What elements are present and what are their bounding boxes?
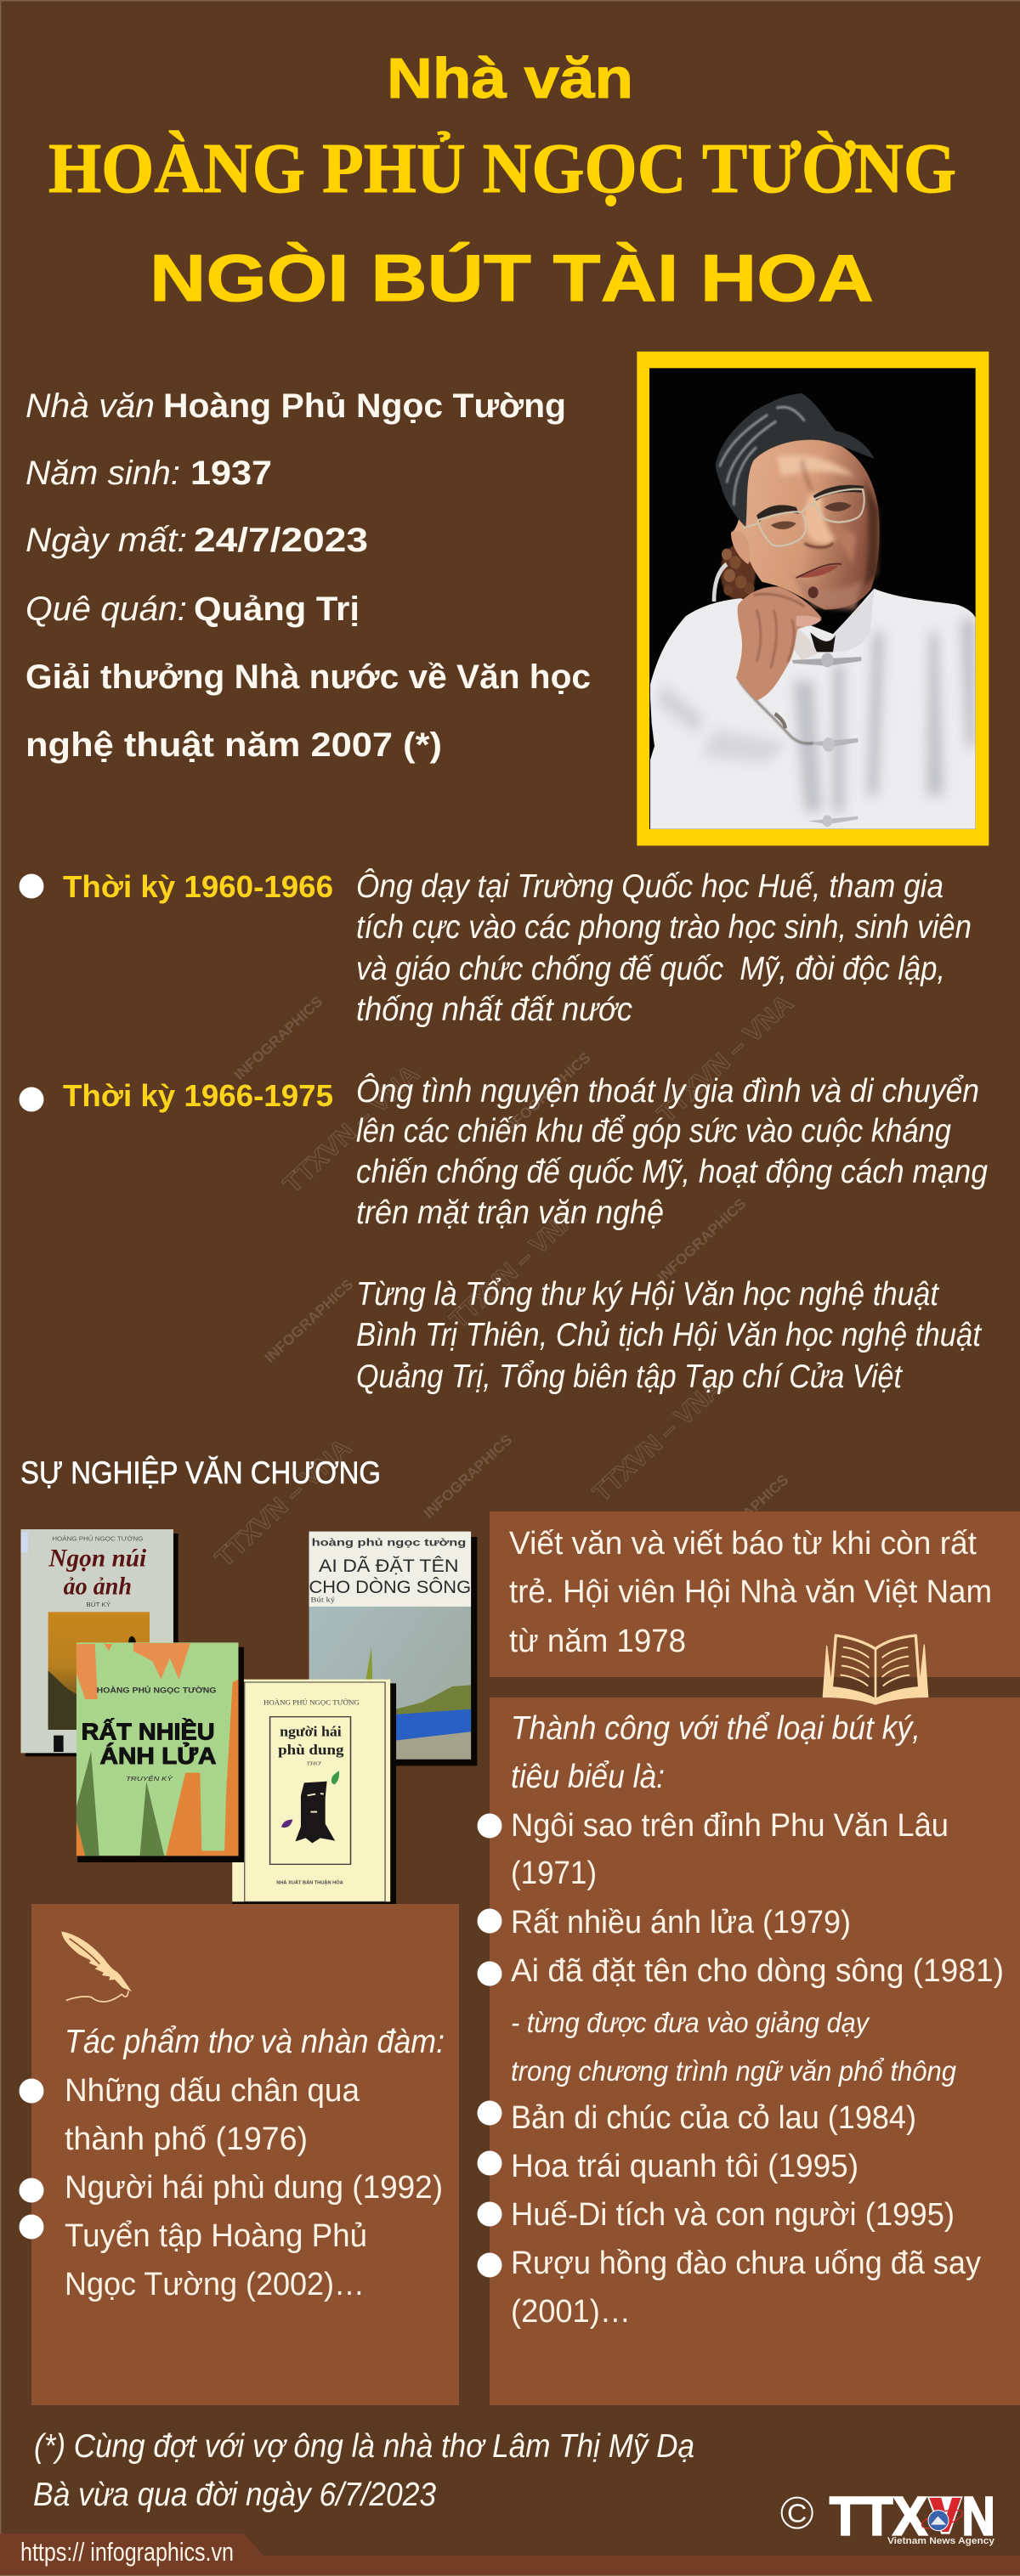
panel: essays: (1971) bbox=[511, 1856, 597, 1891]
title bbox=[48, 47, 956, 315]
watermarks: INFOGRAPHICS bbox=[421, 1432, 515, 1522]
book cover: Người hái phù dung: HOÀNG PHỦ NGỌC TƯỜNG bbox=[264, 1698, 360, 1707]
book cover: Rất nhiều ánh lửa: TRUYỆN KÝ bbox=[126, 1775, 173, 1782]
book covers bbox=[20, 1529, 477, 1906]
book cover: Ngọn núi ảo ảnh: Ngọn núi bbox=[48, 1544, 146, 1572]
profile text: Hoàng Phủ Ngọc Tường bbox=[163, 387, 566, 425]
book cover: Rất nhiều ánh lửa: RẤT NHIỀU bbox=[82, 1719, 215, 1745]
panel: poetry: Tuyển tập Hoàng Phủ bbox=[65, 2218, 367, 2254]
book cover: Ngọn núi ảo ảnh: BÚT KÝ bbox=[86, 1601, 110, 1608]
timeline: 1960-1966: và giáo chức chống đế quốc Mỹ, đòi độc lập, bbox=[356, 951, 945, 987]
book cover: Người hái phù dung: người hái bbox=[280, 1723, 342, 1740]
profile text: 24/7/2023 bbox=[194, 522, 368, 559]
panel: membership: Viết văn và viết báo từ khi còn rất bbox=[509, 1526, 977, 1562]
panel: essays: Huế-Di tích và con người (1995) bbox=[511, 2197, 955, 2233]
footnote bbox=[33, 2428, 694, 2513]
panel: poetry: Những dấu chân qua bbox=[65, 2073, 360, 2109]
profile text: Quê quán: bbox=[26, 590, 187, 628]
book cover: Ai đã đặt tên cho dòng sông: AI DÃ ĐẶT TÊN bbox=[319, 1555, 459, 1576]
book cover: Ai đã đặt tên cho dòng sông: Bút ký bbox=[310, 1596, 336, 1603]
watermarks: INFOGRAPHICS bbox=[262, 1276, 356, 1366]
title: Nhà văn bbox=[387, 47, 633, 110]
watermarks: TTXVN – VNA bbox=[210, 1433, 357, 1573]
profile text: Giải thưởng Nhà nước về Văn học bbox=[26, 658, 591, 696]
book cover: Ai đã đặt tên cho dòng sông bbox=[309, 1532, 477, 1765]
panel: essays: Hoa trái quanh tôi (1995) bbox=[511, 2149, 858, 2184]
title: NGÒI BÚT TÀI HOA bbox=[150, 240, 874, 315]
book cover: Ngọn núi ảo ảnh: ảo ảnh bbox=[64, 1573, 132, 1600]
section heading: SỰ NGHIỆP VĂN CHƯƠNG bbox=[20, 1455, 381, 1490]
panel: essays: tiêu biểu là: bbox=[511, 1759, 665, 1795]
panel: essays: Rất nhiều ánh lửa (1979) bbox=[511, 1905, 851, 1940]
profile text: 1937 bbox=[190, 455, 272, 492]
panel: poetry: Ngọc Tường (2002)… bbox=[65, 2267, 365, 2302]
book cover: Ai đã đặt tên cho dòng sông: hoàng phủ ngọc tường bbox=[312, 1536, 466, 1548]
timeline: 1966-1975: Ông tình nguyện thoát ly gia đình và di chuyển bbox=[356, 1072, 979, 1110]
footer ribbon with URL: https:// infographics.vn bbox=[20, 2537, 234, 2567]
panel: essays: - từng được đưa vào giảng dạy bbox=[511, 2007, 870, 2038]
title: HOÀNG PHỦ NGỌC TƯỜNG bbox=[48, 129, 956, 208]
watermarks: TTXVN – VNA bbox=[278, 1059, 425, 1199]
book cover: Người hái phù dung: NHÀ XUẤT BẢN THUẬN HÓA bbox=[276, 1879, 343, 1885]
portrait photo with yellow frame bbox=[637, 352, 989, 845]
panel: membership bbox=[490, 1511, 1020, 1677]
watermarks bbox=[210, 989, 799, 1573]
timeline: 1960-1966 bbox=[19, 867, 972, 1028]
profile text: Ngày mất: bbox=[26, 522, 187, 559]
footer ribbon with URL bbox=[0, 2534, 1020, 2576]
panel: essays: Rượu hồng đào chưa uống đã say bbox=[511, 2246, 981, 2281]
panel: membership: trẻ. Hội viên Hội Nhà văn Việt Nam bbox=[509, 1574, 992, 1610]
timeline: 1960-1966: thống nhất đất nước bbox=[356, 991, 632, 1028]
book cover: Ai đã đặt tên cho dòng sông: CHO DÒNG SÔNG bbox=[309, 1576, 471, 1597]
panel: poetry bbox=[19, 1904, 459, 2405]
timeline: 1966-1975: Quảng Trị, Tổng biên tập Tạp chí Cửa Việt bbox=[356, 1359, 904, 1395]
panel: essays bbox=[478, 1698, 1020, 2405]
copyright and TTXVN logo: Vietnam News Agency bbox=[887, 2536, 995, 2546]
book cover: Người hái phù dung bbox=[232, 1680, 396, 1906]
profile text: Quảng Trị bbox=[194, 590, 360, 628]
panel: poetry: thành phố (1976) bbox=[65, 2121, 308, 2157]
watermarks: TTXVN – VNA bbox=[445, 1203, 582, 1334]
watermarks: TTXVN – VNA bbox=[652, 989, 799, 1128]
panel: essays: Ai đã đặt tên cho dòng sông (1981) bbox=[511, 1953, 1004, 1989]
panel: essays: Thành công với thể loại bút ký, bbox=[511, 1710, 921, 1747]
book cover: Ngọn núi ảo ảnh bbox=[20, 1529, 178, 1756]
watermarks: INFOGRAPHICS bbox=[654, 1195, 749, 1285]
book cover: Rất nhiều ánh lửa: HOÀNG PHỦ NGỌC TƯỜNG bbox=[97, 1685, 217, 1695]
panel: essays: Bản di chúc của cỏ lau (1984) bbox=[511, 2100, 916, 2136]
timeline: 1966-1975: trên mặt trận văn nghệ bbox=[356, 1195, 664, 1231]
book cover: Rất nhiều ánh lửa: ÁNH LỬA bbox=[99, 1743, 216, 1769]
book cover: Người hái phù dung: phù dung bbox=[278, 1742, 344, 1759]
icon: open book bbox=[823, 1635, 928, 1704]
footnote: Bà vừa qua đời ngày 6/7/2023 bbox=[33, 2477, 436, 2513]
watermarks: INFOGRAPHICS bbox=[697, 1472, 791, 1562]
panel: membership: từ năm 1978 bbox=[509, 1624, 686, 1659]
timeline: 1966-1975: Từng là Tổng thư ký Hội Văn học nghệ thuật bbox=[356, 1276, 940, 1313]
profile text: Năm sinh: bbox=[26, 455, 180, 492]
watermarks: INFOGRAPHICS bbox=[499, 1049, 593, 1139]
timeline: 1966-1975 bbox=[19, 1072, 988, 1395]
panel: essays: trong chương trình ngữ văn phổ thông bbox=[511, 2055, 957, 2087]
copyright and TTXVN logo: TTX bbox=[830, 2485, 927, 2546]
book cover: Ngọn núi ảo ảnh: HOÀNG PHỦ NGỌC TƯỜNG bbox=[52, 1535, 143, 1542]
profile text: Nhà văn bbox=[26, 387, 155, 425]
panel: essays: Ngôi sao trên đỉnh Phu Văn Lâu bbox=[511, 1808, 949, 1844]
panel: essays: (2001)… bbox=[511, 2294, 631, 2330]
watermarks: INFOGRAPHICS bbox=[231, 993, 326, 1083]
copyright and TTXVN logo: N bbox=[962, 2485, 995, 2546]
profile text: nghệ thuật năm 2007 (*) bbox=[26, 726, 442, 764]
panel: poetry: Người hái phù dung (1992) bbox=[65, 2170, 443, 2206]
timeline: 1966-1975: lên các chiến khu để góp sức vào cuộc kháng bbox=[356, 1113, 951, 1150]
watermarks: TTXVN – VNA bbox=[587, 1374, 728, 1507]
footnote: (*) Cùng đợt với vợ ông là nhà thơ Lâm Thị Mỹ Dạ bbox=[34, 2428, 694, 2465]
book cover: Người hái phù dung: THƠ bbox=[306, 1761, 322, 1767]
copyright and TTXVN logo: C bbox=[787, 2500, 807, 2528]
timeline: 1960-1966: Thời kỳ 1960-1966 bbox=[63, 869, 333, 904]
profile text bbox=[26, 387, 591, 764]
timeline: 1966-1975: Thời kỳ 1966-1975 bbox=[63, 1078, 333, 1113]
book cover: Rất nhiều ánh lửa bbox=[76, 1642, 244, 1862]
icon: feather quill bbox=[61, 1931, 132, 2002]
copyright and TTXVN logo bbox=[782, 2485, 995, 2546]
panel: poetry: Tác phẩm thơ và nhàn đàm: bbox=[65, 2024, 445, 2060]
timeline: 1960-1966: Ông dạy tại Trường Quốc học Huế, tham gia bbox=[356, 867, 944, 905]
